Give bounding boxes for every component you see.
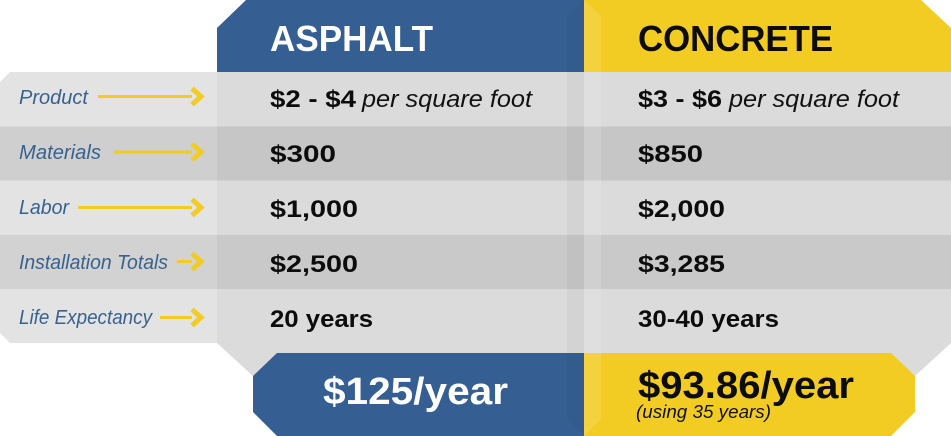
column: asphalt values: $300 — [270, 141, 336, 168]
header: concrete: CONCRETE — [638, 18, 833, 59]
label: Installation Totals: Installation Totals — [19, 252, 168, 274]
label: Materials — [19, 142, 201, 164]
footer: concrete cost per year: (using 35 years) — [636, 402, 771, 422]
column: concrete values: $3,285 — [638, 251, 725, 278]
header: asphalt: ASPHALT — [270, 18, 433, 59]
column: asphalt values: $2 - $4 — [270, 86, 357, 113]
footer: asphalt cost per year — [253, 353, 584, 436]
footer: concrete cost per year: $93.86/year — [638, 365, 854, 407]
fold: central column shading — [567, 0, 601, 436]
column: concrete values: $2,000 — [638, 196, 725, 223]
label: Product: Product — [19, 87, 89, 109]
column: asphalt values: $1,000 — [270, 196, 358, 223]
column: concrete values: $850 — [638, 141, 703, 168]
label: Product — [19, 87, 201, 109]
column: asphalt values: per square foot — [361, 86, 533, 113]
column: concrete values — [638, 86, 900, 333]
column: asphalt values: $2,500 — [270, 251, 358, 278]
panel: row labels — [0, 72, 217, 343]
column: concrete values: 30-40 years — [638, 306, 779, 333]
label: Life Expectancy: Life Expectancy — [19, 307, 153, 329]
header: asphalt — [217, 0, 584, 72]
footer: asphalt cost per year: $125/year — [323, 371, 508, 413]
label: Materials: Materials — [19, 142, 101, 164]
column: concrete values: $3 - $6 — [638, 86, 722, 113]
footer: concrete cost per year — [584, 353, 915, 436]
label: Labor — [19, 197, 201, 219]
column: concrete values: per square foot — [728, 86, 900, 113]
column: asphalt values — [270, 86, 533, 333]
panel: comparison table — [217, 72, 951, 376]
label: Labor: Labor — [19, 197, 70, 219]
header: concrete — [584, 0, 951, 72]
column: asphalt values: 20 years — [270, 306, 373, 333]
